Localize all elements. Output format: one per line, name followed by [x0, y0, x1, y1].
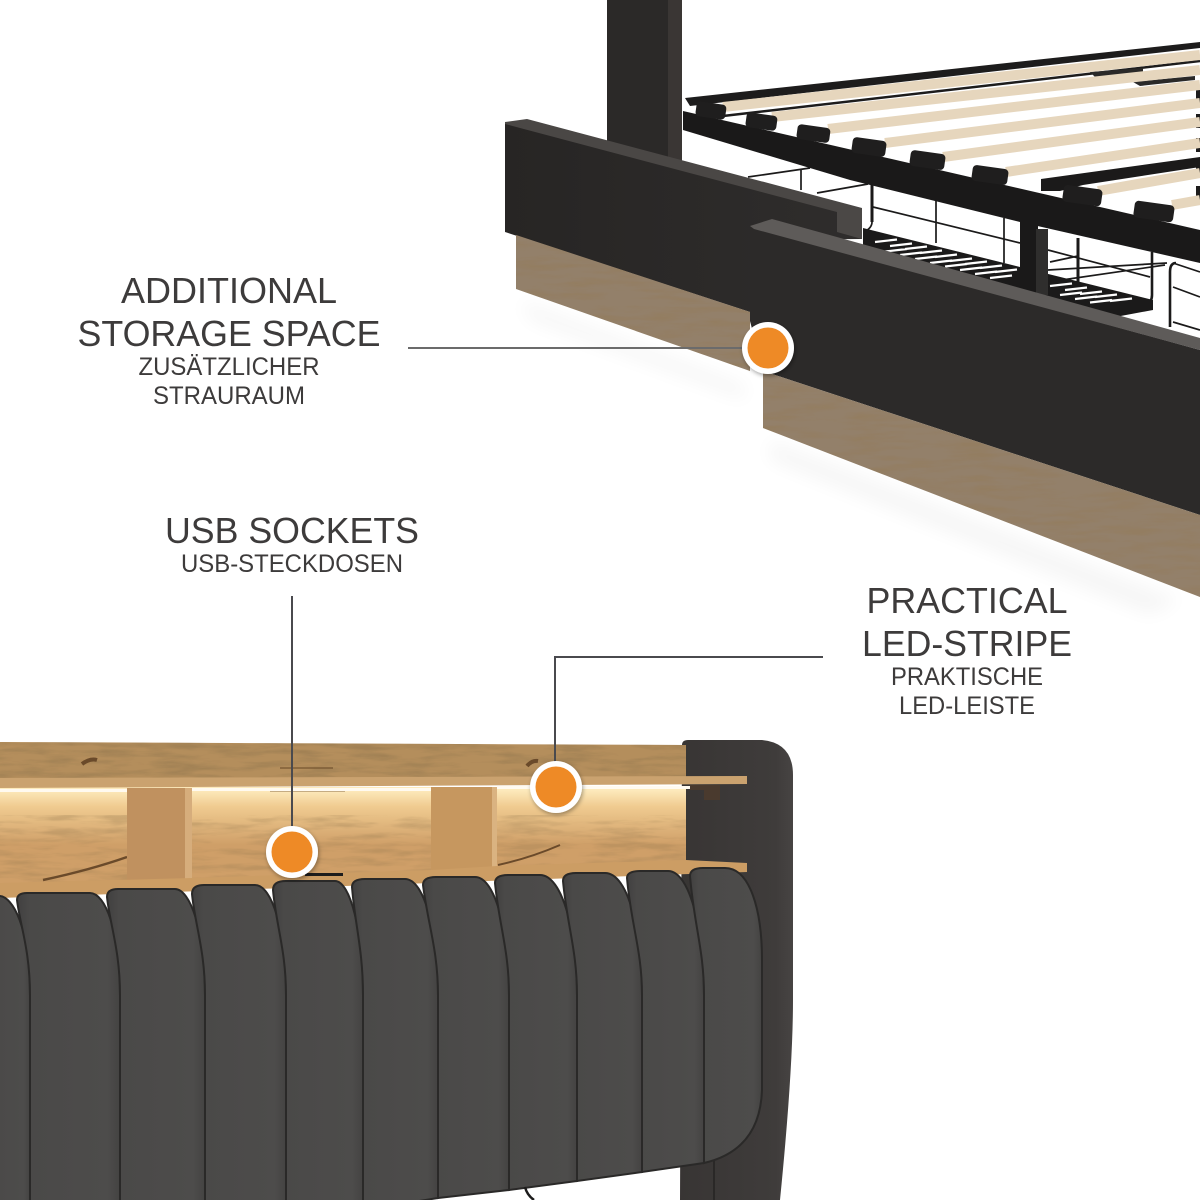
- panel: headboard with shelf and LED strip: [0, 740, 793, 1200]
- upholstered side post: [680, 740, 793, 1200]
- frame leg: [1020, 222, 1048, 295]
- leader line: LED: [555, 657, 823, 765]
- marker: LED: [530, 761, 582, 813]
- plinth grain, rear: [516, 235, 750, 371]
- plinth grain, front: [763, 371, 1200, 597]
- label: additional storage space: [78, 270, 380, 410]
- metal frame rail: [683, 111, 1200, 263]
- storage basket wires: [748, 168, 1200, 330]
- marker: storage: [742, 322, 794, 374]
- label: additional storage space: STRAURAUM: [153, 382, 305, 410]
- post seam: [713, 1160, 715, 1200]
- label: additional storage space: ZUSÄTZLICHER: [138, 353, 320, 381]
- back metal rail: [685, 42, 1200, 106]
- leader line: storage: [408, 347, 745, 349]
- slat holders: [695, 101, 1175, 223]
- second frame section: [1041, 157, 1200, 191]
- upper wood panel: [0, 742, 686, 782]
- lower shelf surface: [0, 860, 747, 898]
- label: practical LED stripe: [862, 580, 1072, 720]
- upper panel grain: [0, 742, 686, 782]
- label: additional storage space: STORAGE SPACE: [78, 313, 380, 354]
- wooden plinth, front section: [763, 371, 1200, 597]
- leader line: USB: [291, 596, 293, 830]
- label: additional storage space: ADDITIONAL: [121, 270, 337, 311]
- label: practical LED stripe: LED-LEISTE: [899, 692, 1035, 720]
- side board, front section: [750, 219, 1200, 515]
- floor shadows: [520, 300, 1180, 615]
- wood knots and cracks: [43, 760, 560, 880]
- marker: USB: [266, 826, 318, 878]
- power cord: [525, 1187, 534, 1200]
- lower back rail: [723, 61, 1200, 116]
- niche back wall: [0, 787, 686, 886]
- label: practical LED stripe: PRACTICAL: [866, 580, 1068, 621]
- label: practical LED stripe: LED-STRIPE: [862, 623, 1072, 664]
- label: practical LED stripe: PRAKTISCHE: [891, 663, 1043, 691]
- USB socket: [305, 873, 343, 876]
- wooden plinth, rear section: [516, 235, 750, 371]
- panel: bed frame with storage basket: [505, 0, 1200, 615]
- basket mesh floor: [863, 228, 1153, 318]
- small frame pieces: [1090, 68, 1195, 86]
- shelf bracket: [690, 785, 720, 800]
- upholstered channels: [0, 868, 762, 1200]
- label: USB sockets: USB SOCKETS: [165, 510, 419, 551]
- LED strip: [0, 786, 690, 792]
- upper shelf: [0, 776, 747, 788]
- right frame bar: [1196, 90, 1200, 200]
- label: USB sockets: USB-STECKDOSEN: [181, 550, 403, 578]
- bed post: [607, 0, 682, 182]
- niche grain: [0, 815, 686, 886]
- shelf dividers: [127, 787, 497, 882]
- side board, rear section: [505, 119, 862, 312]
- mattress slats: [723, 55, 1200, 205]
- label: USB sockets: [165, 510, 419, 578]
